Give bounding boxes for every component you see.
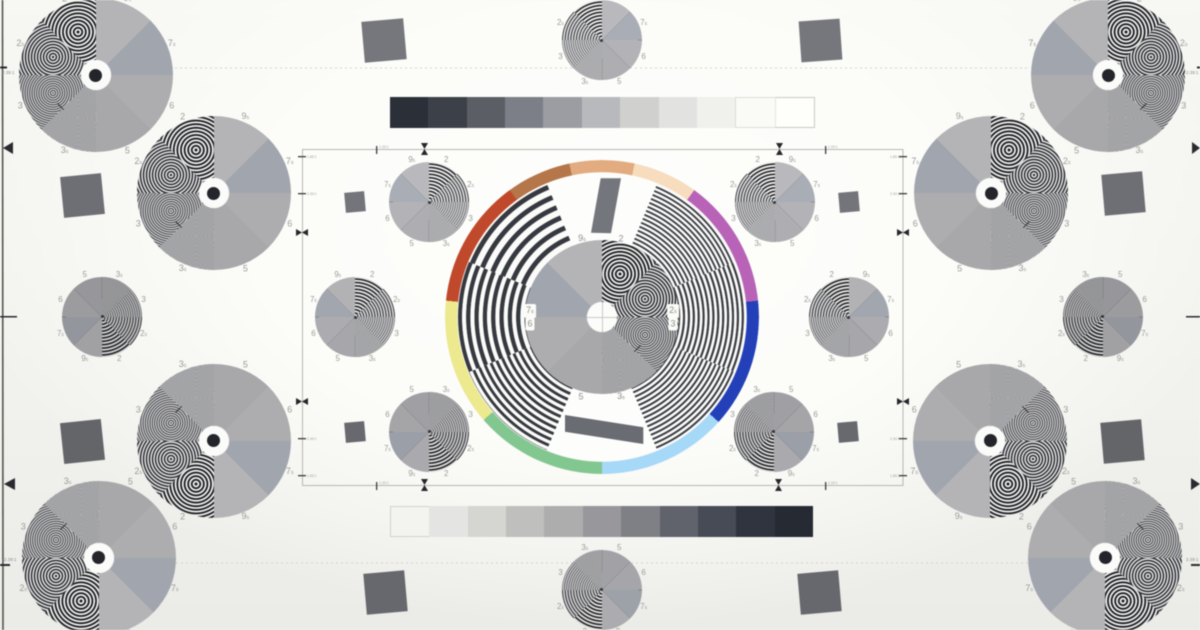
scale numbers: 5 [1071, 477, 1076, 487]
disc face [62, 277, 142, 357]
scale numbers: 3 [394, 329, 399, 338]
outer ticks and triangles, right [1186, 66, 1200, 566]
scale numbers: 2 [180, 511, 185, 521]
scale numbers: 75 [384, 444, 391, 453]
scale numbers [729, 385, 820, 478]
disc face [1028, 481, 1182, 630]
scale numbers: 75 [1141, 329, 1148, 338]
scale numbers [57, 270, 148, 363]
scale numbers: 95 [81, 354, 88, 363]
scale numbers: 3 [1059, 295, 1064, 304]
scale numbers: 2 [370, 270, 374, 279]
scale numbers: 6 [912, 404, 917, 414]
scale numbers: 25 [19, 583, 27, 593]
outer ratio text: 2.39:1 [1186, 557, 1199, 562]
disc face [19, 0, 173, 152]
disc face [809, 277, 889, 357]
scale numbers: 2 [1084, 354, 1088, 363]
small disc inner upper right [730, 155, 820, 248]
large disc upper left [134, 111, 294, 273]
scale numbers [19, 476, 179, 630]
scale numbers: 75 [887, 295, 894, 304]
scale numbers: 5 [410, 385, 414, 394]
scale numbers [1025, 476, 1185, 630]
scale numbers [134, 111, 294, 273]
grey square bottom left inner [363, 570, 407, 614]
scale numbers: 2 [755, 469, 759, 478]
grey square top left inner [361, 18, 407, 63]
grey square top right inner [799, 19, 842, 62]
large disc lower left [134, 359, 294, 521]
scale numbers: 5 [956, 360, 961, 370]
scale numbers: 95 [956, 111, 963, 121]
scale numbers: 6 [1030, 101, 1035, 111]
scale numbers: 2 [180, 112, 185, 122]
scale numbers: 95 [955, 511, 962, 521]
inner frame [302, 150, 903, 486]
scale numbers: 5 [410, 239, 414, 248]
scale numbers: 35 [1132, 476, 1140, 486]
scale numbers: 75 [168, 38, 176, 48]
scale numbers: 3 [558, 52, 563, 61]
small disc far left [57, 270, 148, 363]
scale numbers: 6 [58, 295, 63, 304]
scale numbers: 3 [805, 329, 810, 338]
scale numbers: 3 [468, 214, 473, 223]
scale numbers: 75 [1025, 583, 1033, 593]
central disc face [525, 240, 679, 394]
disc face [913, 364, 1067, 518]
scale numbers: 75 [910, 466, 918, 476]
scale numbers: 6 [814, 214, 819, 223]
central scale numbers: 3 [670, 318, 676, 328]
scale numbers: 25 [140, 329, 147, 338]
scale numbers: 5 [243, 360, 248, 370]
scale numbers: 6 [169, 101, 174, 111]
scale numbers: 25 [1058, 329, 1065, 338]
disc face [137, 116, 291, 270]
scale numbers: 25 [557, 18, 564, 27]
scale numbers: 2 [1019, 511, 1024, 521]
scale numbers [384, 155, 474, 248]
frame ratio text: 2.39:1 [307, 437, 317, 441]
scale numbers: 3 [1178, 521, 1183, 531]
scale numbers: 5 [243, 263, 248, 273]
scale numbers: 5 [1118, 270, 1122, 279]
scale numbers: 25 [1177, 583, 1185, 593]
scale numbers: 25 [557, 602, 564, 611]
disc face [562, 0, 642, 80]
scale numbers: 6 [641, 568, 646, 577]
scale numbers: 75 [813, 180, 820, 189]
scale numbers: 95 [241, 511, 249, 521]
small square upper right [838, 191, 860, 213]
scale numbers: 75 [911, 156, 919, 166]
scale numbers: 95 [788, 469, 795, 478]
scale numbers: 5 [617, 77, 621, 86]
frame ratio text: 2.39:1 [307, 192, 317, 196]
disc face [315, 277, 395, 357]
scale numbers: 6 [287, 219, 292, 229]
scale numbers: 75 [1028, 38, 1036, 48]
scale numbers: 2 [756, 155, 760, 164]
scale numbers: 5 [128, 477, 133, 487]
scale numbers: 35 [1082, 270, 1089, 279]
scale numbers: 5 [957, 263, 962, 273]
scale numbers [557, 543, 648, 630]
disc face [1063, 277, 1143, 357]
scale numbers: 6 [888, 329, 893, 338]
scale numbers: 3 [731, 214, 736, 223]
scale numbers: 95 [1117, 354, 1124, 363]
scale numbers: 35 [581, 543, 588, 552]
scale numbers: 75 [640, 602, 647, 611]
scale numbers: 25 [16, 38, 24, 48]
scale numbers: 75 [286, 466, 294, 476]
scale numbers: 35 [1017, 359, 1025, 369]
scale numbers: 5 [790, 239, 794, 248]
small disc top centre [557, 0, 648, 86]
small square upper left [344, 191, 366, 213]
frame ratio text: 1.33:1 [379, 145, 389, 149]
scale numbers: 35 [828, 354, 835, 363]
scale numbers: 6 [385, 214, 390, 223]
frame ratio text: 2.39:1 [890, 192, 900, 196]
large disc top left [16, 0, 176, 155]
scale numbers [384, 385, 474, 478]
bottom grey step wedge [390, 505, 814, 538]
scale numbers: 35 [64, 476, 71, 486]
small square lower right [837, 421, 859, 443]
scale numbers: 95 [863, 270, 870, 279]
small disc inner upper left [384, 155, 474, 248]
frame ticks [298, 146, 907, 490]
scale numbers: 25 [393, 295, 400, 304]
scale numbers: 5 [864, 354, 868, 363]
scale numbers: 3 [18, 101, 23, 111]
scale numbers: 35 [116, 270, 123, 279]
disc face [22, 481, 176, 630]
scale numbers: 35 [1018, 263, 1026, 273]
scale numbers: 6 [1142, 295, 1147, 304]
frame ratio text: 1.85:1 [890, 474, 900, 478]
scale numbers: 3 [558, 568, 563, 577]
scale numbers: 25 [1063, 156, 1071, 166]
scale numbers: 95 [241, 111, 249, 121]
scale numbers: 2 [830, 270, 834, 279]
scale numbers: 35 [443, 385, 450, 394]
small disc far right [1058, 270, 1148, 363]
scale numbers: 25 [467, 180, 474, 189]
scale numbers: 2 [444, 155, 448, 164]
scale numbers: 6 [385, 410, 390, 419]
scale numbers: 25 [134, 466, 142, 476]
small disc inner middle left [310, 270, 400, 363]
disc face [734, 392, 814, 472]
scale numbers: 2 [1020, 112, 1025, 122]
large disc upper right [911, 111, 1071, 273]
scale numbers: 25 [467, 444, 474, 453]
scale numbers [557, 0, 648, 86]
outer ratio text: 2.39:1 [4, 557, 17, 562]
scale numbers: 25 [804, 295, 811, 304]
central scale numbers: 35 [617, 391, 625, 401]
scale numbers: 5 [1074, 145, 1079, 155]
scale numbers: 75 [310, 295, 317, 304]
central colour ring [445, 160, 759, 474]
scale numbers [310, 270, 400, 363]
scale numbers: 5 [336, 354, 340, 363]
outer ratio text: 2.39:1 [2, 70, 15, 75]
scale numbers: 6 [172, 521, 177, 531]
large disc bottom left [19, 476, 179, 630]
scale numbers: 3 [136, 219, 141, 229]
scale numbers [1028, 0, 1188, 155]
scale numbers: 95 [334, 270, 341, 279]
bow-tie centre marks [296, 143, 909, 491]
frame ratio text: 2.39:1 [890, 437, 900, 441]
scale numbers: 5 [789, 385, 793, 394]
scale numbers: 5 [125, 145, 130, 155]
frame ratio text: 1.33:1 [828, 481, 838, 485]
scale numbers: 3 [730, 410, 735, 419]
scale numbers: 35 [1135, 145, 1143, 155]
scale numbers: 25 [729, 444, 736, 453]
large disc bottom right [1025, 476, 1185, 630]
disc face [735, 162, 815, 242]
dotted 2.39:1 guide lines [175, 68, 1030, 563]
scale numbers: 25 [1180, 38, 1188, 48]
scale numbers [910, 359, 1070, 521]
scale numbers: 6 [813, 410, 818, 419]
scale numbers [134, 359, 294, 521]
disc face [389, 162, 469, 242]
grey square left upper [60, 173, 105, 217]
scale numbers: 75 [286, 156, 294, 166]
grey square left lower [60, 418, 105, 464]
scale numbers: 75 [171, 583, 179, 593]
scale numbers: 2 [117, 354, 121, 363]
frame ratio text: 1.85:1 [890, 155, 900, 159]
top grey step wedge [389, 96, 816, 129]
outer left edge line [2, 0, 4, 630]
small disc inner lower left [384, 385, 474, 478]
scale numbers: 3 [21, 521, 26, 531]
central wedge bar bottom [564, 414, 644, 444]
scale numbers: 5 [617, 543, 621, 552]
scale numbers: 6 [287, 404, 292, 414]
disc face [137, 364, 291, 518]
disc face [914, 116, 1068, 270]
scale numbers: 25 [730, 180, 737, 189]
central wedge bar top [590, 178, 622, 234]
scale numbers: 75 [640, 18, 647, 27]
outer ratio text [2, 70, 1199, 562]
scale numbers: 3 [1181, 101, 1186, 111]
frame ratio text: 1.85:1 [307, 155, 317, 159]
scale numbers [16, 0, 176, 155]
scale numbers: 3 [136, 404, 141, 414]
scale numbers: 35 [753, 385, 760, 394]
scale numbers [730, 155, 820, 248]
outer ratio text: 2.39:1 [1186, 70, 1199, 75]
scale numbers: 3 [1064, 219, 1069, 229]
central scale numbers: 75 [526, 305, 534, 315]
disc face [389, 392, 469, 472]
grey square bottom right inner [797, 570, 841, 614]
disc face [562, 550, 642, 630]
scale numbers: 5 [83, 270, 87, 279]
central stripe annulus [458, 173, 746, 461]
scale numbers: 95 [789, 155, 796, 164]
scale numbers: 35 [369, 354, 376, 363]
scale numbers: 6 [1027, 521, 1032, 531]
frame ratio text: 1.85:1 [307, 474, 317, 478]
central scale numbers: 2 [618, 234, 624, 244]
grey square right upper [1101, 171, 1145, 215]
scale numbers [1058, 270, 1148, 363]
outer ticks and triangles, left [0, 66, 17, 566]
scale numbers: 95 [408, 469, 415, 478]
small disc bottom centre [557, 543, 648, 630]
frame ratio text: 1.33:1 [828, 145, 838, 149]
grey square right lower [1100, 419, 1144, 463]
central scale numbers: 6 [527, 318, 533, 328]
frame ratio text: 1.33:1 [379, 481, 389, 485]
central scale numbers: 95 [578, 233, 586, 243]
scale numbers [911, 111, 1071, 273]
scale numbers: 6 [641, 52, 646, 61]
scale numbers: 25 [1062, 466, 1070, 476]
scale numbers: 3 [468, 410, 473, 419]
large disc top right [1028, 0, 1188, 155]
scale numbers: 3 [1063, 404, 1068, 414]
scale numbers: 3 [141, 295, 146, 304]
scale numbers: 6 [913, 219, 918, 229]
scale numbers: 35 [754, 239, 761, 248]
central disc [524, 233, 680, 402]
scale numbers: 2 [444, 469, 448, 478]
central scale numbers: 5 [578, 392, 584, 402]
central scale numbers: 25 [669, 305, 677, 315]
scale numbers: 35 [61, 145, 68, 155]
frame ratio text [307, 145, 900, 485]
scale numbers [804, 270, 894, 363]
small disc inner middle right [804, 270, 894, 363]
central scale numbers [524, 233, 680, 402]
large disc lower right [910, 359, 1070, 521]
disc face [1031, 0, 1185, 152]
scale numbers: 35 [179, 359, 186, 369]
small square lower left [344, 421, 366, 443]
scale numbers: 75 [384, 180, 391, 189]
scale numbers: 6 [311, 329, 316, 338]
small disc inner lower right [729, 385, 820, 478]
scale numbers: 35 [443, 239, 450, 248]
scale numbers: 95 [408, 155, 415, 164]
scale numbers: 25 [134, 156, 142, 166]
scale numbers: 35 [581, 77, 588, 86]
scale numbers: 75 [812, 444, 819, 453]
scale numbers: 75 [57, 329, 64, 338]
scale numbers: 35 [179, 263, 186, 273]
